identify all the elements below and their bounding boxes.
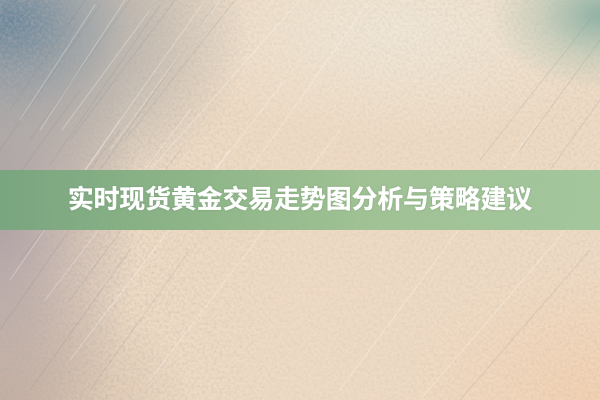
title banner	[0, 170, 600, 230]
title: 实时现货黄金交易走势图分析与策略建议	[68, 186, 532, 214]
